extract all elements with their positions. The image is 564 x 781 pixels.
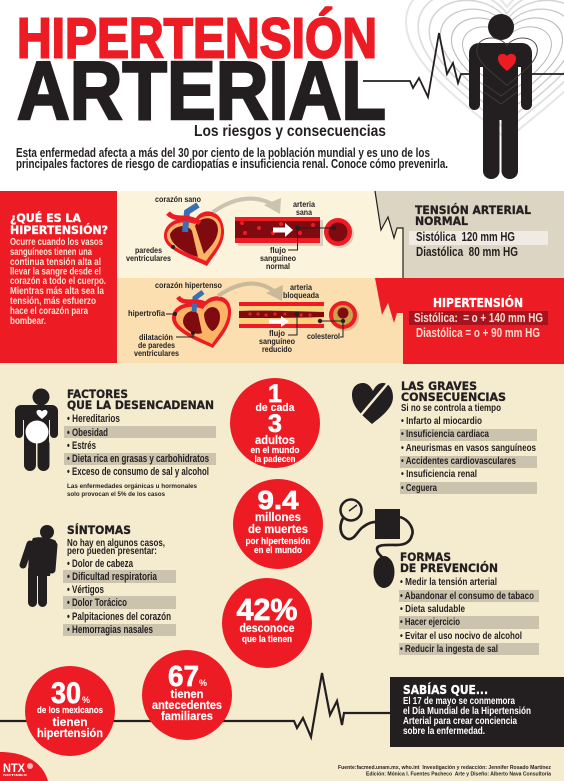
callout: sabias que: Arterial para crear conciencia [403, 715, 517, 727]
panel: sintomas: • Palpitaciones del corazón [67, 611, 171, 623]
stat circle: 1 de cada 3 adultos: 1 [268, 380, 282, 408]
hypertensive diagram labels: arteria [290, 282, 312, 292]
logo: NTX Notimex: NOTIMEX [3, 773, 27, 777]
blocked artery [239, 302, 324, 335]
panel: tension arterial normal [375, 191, 564, 278]
panel: que es la hipertension: sanguíneos tienen una [10, 246, 92, 258]
panel: consecuencias: • Infarto al miocardio [401, 415, 482, 427]
blocked artery cross-section [318, 301, 359, 337]
stat circle: 30%: de los mexicanos [37, 705, 103, 716]
panel: que es la hipertension: hace el corazón para [10, 305, 88, 317]
panel: sintomas: • Hemorragias nasales [67, 624, 153, 636]
stat circle: 42%: que la tienen [242, 634, 292, 644]
panel: sintomas: • Vértigos [67, 584, 104, 596]
healthy artery cross-section [297, 218, 354, 248]
hypertensive diagram labels: reducido [262, 344, 292, 354]
panel: hipertension values: HIPERTENSIÓN [433, 295, 523, 310]
credits [338, 765, 552, 778]
panel: factores: • Hereditarios [67, 413, 120, 425]
panel: sintomas: • Dolor Torácico [67, 597, 127, 609]
panel: prevencion: • Dieta saludable [400, 603, 465, 615]
panel: tension arterial normal: Diastólica 80 mm HG [416, 245, 518, 259]
title: ARTERIAL [17, 44, 386, 137]
ecg line right [530, 73, 564, 75]
panel: que es la hipertension: Mientras más alta sea la [10, 285, 104, 297]
callout: sabias que: SABÍAS QUE... [403, 682, 488, 697]
callout: sabias que [390, 677, 564, 747]
panel: factores [64, 387, 216, 498]
stat circle: 67%: % [199, 678, 207, 688]
panel: sintomas [63, 522, 176, 636]
healthy diagram labels [126, 194, 315, 271]
stat circle: 9.4 millones: de muertes [248, 522, 308, 536]
stat circle: 30%: % [82, 695, 90, 705]
panel: que es la hipertension: continua tensión alta al [10, 256, 101, 268]
callout: sabias que: El 17 de mayo se conmemora [403, 695, 515, 707]
hypertensive diagram labels: corazón hipertenso [155, 280, 222, 290]
panel: tension arterial normal: TENSIÓN ARTERIAL [415, 202, 532, 217]
panel: consecuencias: Si no se controla a tiempo [401, 402, 501, 414]
panel: consecuencias: LAS GRAVES [401, 379, 477, 393]
panel: prevencion: • Medir la tensión arterial [400, 576, 497, 588]
icon: person with heart [469, 14, 537, 179]
healthy heart diagram [164, 205, 224, 266]
panel: prevencion: FORMAS [400, 550, 451, 564]
stat circle: 9.4 millones: millones [255, 510, 301, 524]
ecg line header [363, 33, 475, 97]
hypertensive diagram labels: dilatación [139, 332, 173, 342]
healthy artery [235, 217, 323, 250]
panel: sintomas: • Dificultad respiratoria [67, 571, 158, 583]
panel: healthy diagram background [117, 191, 407, 278]
stat circle: 67%: antecedentes [152, 698, 222, 712]
concentric hearts background [406, 0, 564, 140]
stat circle: 67% [142, 650, 232, 740]
panel: factores: FACTORES [67, 387, 128, 401]
panel: que es la hipertension: ¿QUÉ ES LA [10, 210, 81, 225]
panel: que es la hipertension: HIPERTENSIÓN? [10, 222, 108, 237]
healthy diagram labels: flujo [270, 245, 286, 255]
panel: consecuencias: CONSECUENCIAS [401, 390, 506, 404]
panel: consecuencias: • Ceguera [401, 482, 437, 494]
panel: factores: Las enfermedades orgánicas u hormonales [67, 483, 197, 490]
panel: sintomas: • Dolor de cabeza [67, 558, 134, 570]
stat circle: 42%: desconoce [240, 623, 294, 635]
panel: que es la hipertension: llevar la sangre desde el [10, 266, 101, 278]
stat circle: 1 de cada 3 adultos: 3 [268, 410, 282, 438]
credits: Edición: Mónica I. Fuentes Pacheco Arte y Diseño: Alberto Nava Consultoría [366, 772, 552, 778]
icon: blood pressure monitor [340, 500, 412, 588]
panel: consecuencias [400, 379, 537, 494]
arrow: healthy heart to artery [213, 198, 281, 214]
intro text [16, 146, 448, 171]
hypertensive diagram labels: colesterol [307, 331, 340, 341]
panel: factores: solo provocan el 5% de los casos [67, 491, 165, 498]
healthy diagram labels: normal [266, 261, 290, 271]
panel: que es la hipertension: corazón a todo el cuerpo. [10, 275, 106, 287]
subtitle: Los riesgos y consecuencias [194, 123, 386, 140]
panel: sintomas: pero pueden presentar: [67, 545, 157, 557]
stat circle: 30%: tienen [52, 715, 88, 729]
stat circle: 9.4 millones: por hipertensión [246, 536, 310, 546]
stat circle: 30%: 30 [51, 677, 81, 710]
panel: consecuencias: • Insuficiencia renal [401, 468, 477, 480]
panel: prevencion: • Evitar el uso nocivo de alcohol [400, 630, 522, 642]
arrow: hypertensive heart to artery [218, 284, 283, 301]
stat circle: 30%: hipertensión [37, 726, 103, 740]
panel: factores: • Obesidad [67, 427, 108, 439]
healthy diagram labels: paredes [135, 245, 162, 255]
icon: person with symptoms [23, 525, 56, 607]
credits: Fuente:facmed.unam.mx, who.int Investigación y redacción: Jennifer Rosado Martínez [338, 765, 551, 771]
panel: factores: QUE LA DESENCADENAN [67, 398, 214, 412]
logo: NTX Notimex: NTX [3, 761, 25, 775]
stat circle: 30% [25, 666, 115, 756]
panel: que es la hipertension: tensión, más esfuerzo [10, 295, 96, 307]
stat circle: 9.4 millones [233, 479, 323, 569]
hypertensive diagram labels: de paredes [138, 340, 175, 350]
icon: person with obesity [15, 388, 58, 471]
icon: broken heart [352, 383, 393, 424]
hypertensive diagram labels: sanguíneo [259, 336, 295, 346]
panel: prevencion [399, 550, 539, 655]
panel: que es la hipertension: Ocurre cuando los vasos [10, 236, 103, 248]
healthy diagram labels: sanguíneo [260, 253, 296, 263]
panel: tension arterial normal: Sistólica 120 mm HG [416, 230, 515, 244]
title [17, 6, 386, 137]
panel: tension arterial normal: NORMAL [415, 214, 469, 228]
stat circle: 9.4 millones: 9.4 [258, 485, 299, 515]
stat circle: 1 de cada 3 adultos: la padecen [254, 454, 296, 464]
hypertensive diagram labels [128, 280, 340, 358]
panel: hipertension values [375, 278, 564, 364]
panel: hypertensive diagram background [117, 278, 407, 363]
callout: sabias que: sobre la enfermedad. [403, 725, 485, 737]
hypertensive diagram labels: bloqueada [283, 290, 319, 300]
stat circle: 67%: tienen [170, 687, 204, 701]
stat circle: 9.4 millones: en el mundo [254, 545, 302, 555]
healthy diagram labels: sana [296, 207, 312, 217]
stat circle: 1 de cada 3 adultos: de cada [256, 402, 295, 414]
panel: prevencion: • Hacer ejercicio [400, 616, 460, 628]
panel: que es la hipertension [0, 191, 117, 363]
hypertensive diagram labels: flujo [269, 328, 285, 338]
intro text: Esta enfermedad afecta a más del 30 por ciento de la población mundial y es uno de los [16, 146, 430, 160]
healthy diagram labels: arteria [293, 199, 315, 209]
panel: sintomas: SÍNTOMAS [67, 522, 131, 537]
panel: prevencion: • Reducir la ingesta de sal [400, 643, 498, 655]
healthy diagram labels: corazón sano [155, 194, 201, 204]
hypertensive diagram labels: ventriculares [134, 348, 179, 358]
panel: que es la hipertension: bombear. [10, 315, 46, 327]
stat circle: 42%: 42% [236, 592, 298, 627]
logo: NTX Notimex [0, 752, 48, 781]
stat circle: 1 de cada 3 adultos [230, 378, 320, 468]
stat circle: 1 de cada 3 adultos: en el mundo [250, 445, 300, 455]
panel: prevencion: DE PREVENCIÓN [400, 560, 498, 575]
title: HIPERTENSIÓN [17, 6, 377, 70]
stat circle: 42% [222, 578, 312, 668]
stat circle: 67%: 67 [168, 661, 199, 693]
panel: factores: • Exceso de consumo de sal y alcohol [67, 466, 209, 478]
panel: factores: • Estrés [67, 440, 96, 452]
healthy diagram labels: ventriculares [126, 253, 171, 263]
stat circle: 67%: familiares [161, 709, 213, 723]
panel: consecuencias: • Insuficiencia cardiaca [401, 428, 489, 440]
panel: factores: • Dieta rica en grasas y carbohidratos [67, 453, 209, 465]
panel: consecuencias: • Accidentes cardiovasculares [401, 455, 516, 467]
hypertensive heart diagram [166, 292, 231, 348]
intro text: principales factores de riesgo de cardiopatías e insuficiencia renal. Conoce cómo prevenirla. [16, 157, 448, 171]
ecg line bottom [0, 673, 392, 737]
callout: sabias que: el Día Mundial de la Hipertensión [403, 705, 531, 717]
panel: sintomas: No hay en algunos casos, [67, 537, 165, 549]
stat circle: 1 de cada 3 adultos: adultos [255, 433, 295, 447]
hypertensive diagram labels: hipertrofia [128, 308, 165, 318]
